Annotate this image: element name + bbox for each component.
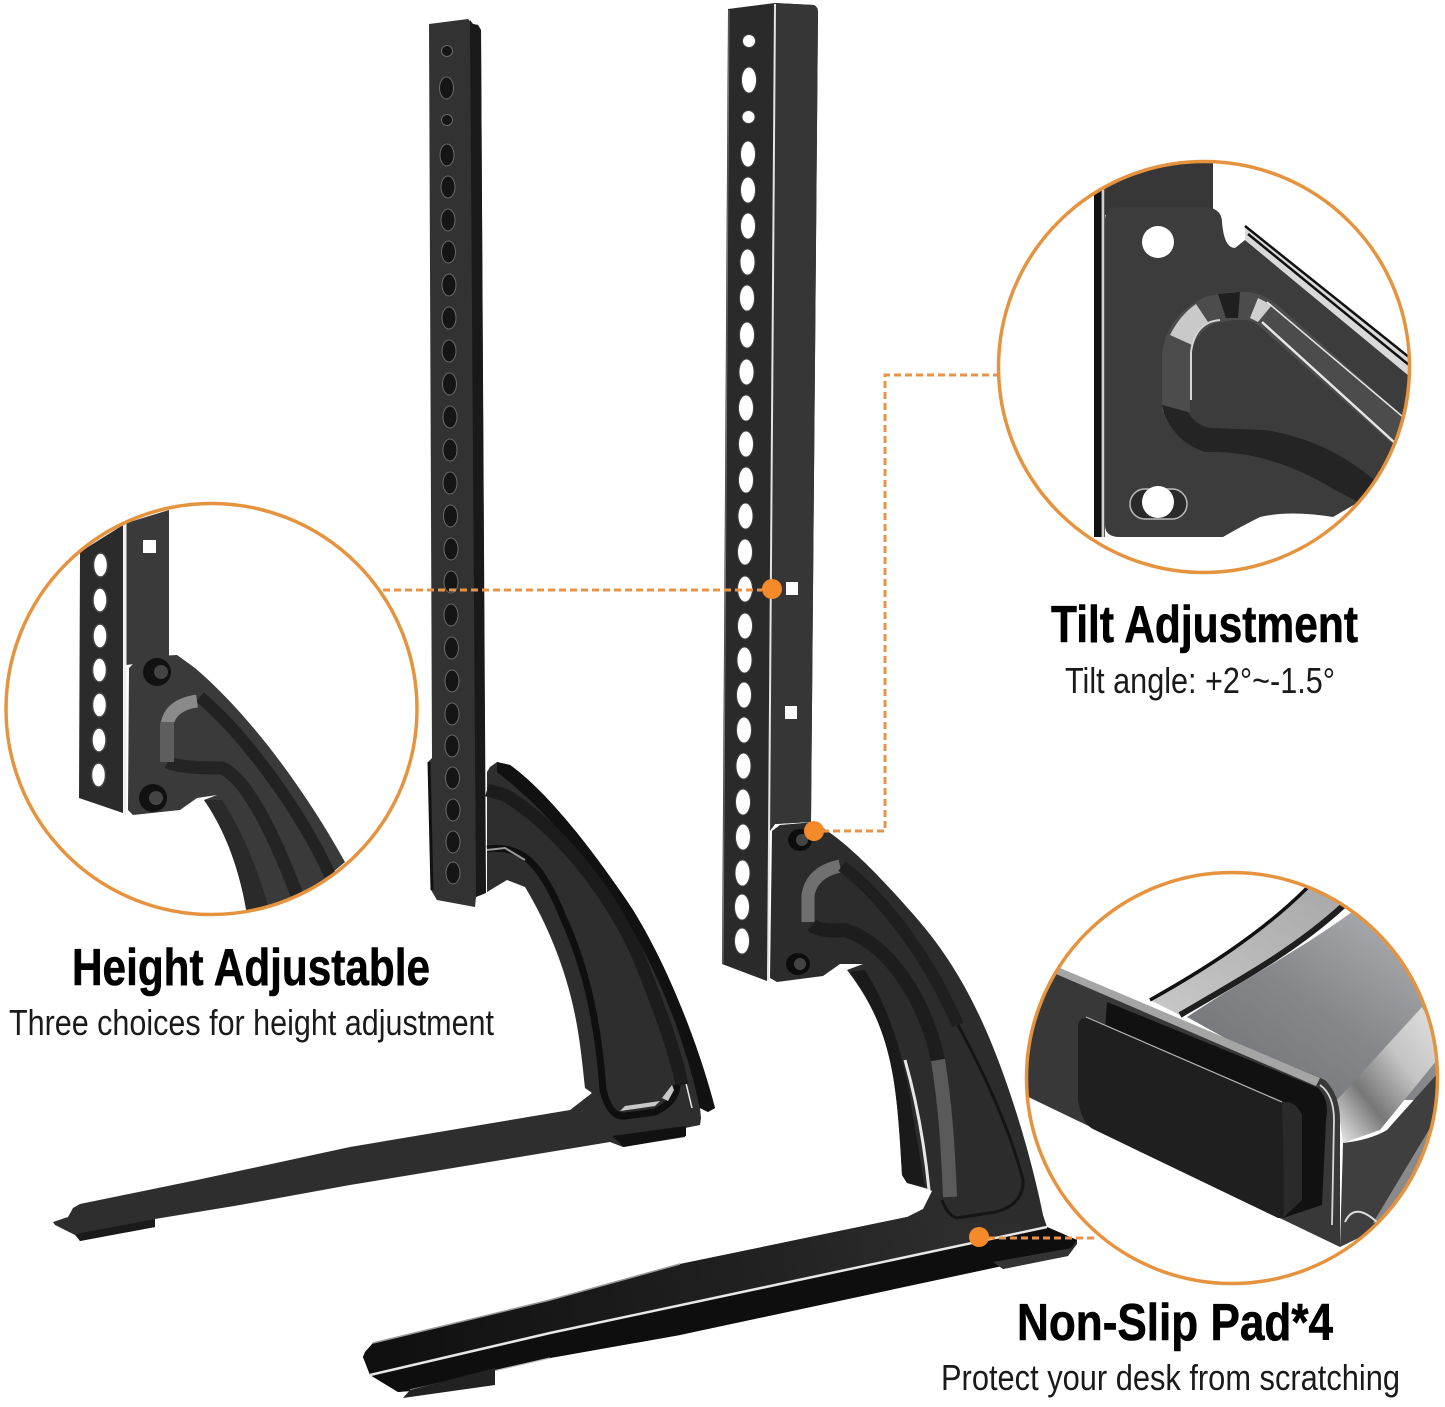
orange marker: height adjustment	[762, 579, 782, 599]
orange marker: tilt	[804, 821, 824, 841]
callout: tilt adjustment detail circle	[998, 150, 1420, 572]
right stand	[363, 3, 1077, 1398]
label: height adjustable: Height Adjustable	[72, 939, 430, 997]
label: tilt adjustment	[1051, 596, 1358, 701]
orange marker: pad	[969, 1227, 989, 1247]
label: tilt adjustment: Tilt angle: +2°~-1.5°	[1065, 660, 1335, 701]
label: tilt adjustment: Tilt Adjustment	[1051, 596, 1358, 654]
dashed connector: height adjustable	[383, 588, 762, 592]
right stand upright bar	[722, 3, 818, 981]
callout: height adjustable detail circle	[6, 504, 417, 915]
dashed connector: non-slip pad	[988, 1236, 1098, 1240]
right bar slots	[734, 34, 756, 954]
left stand	[53, 19, 715, 1241]
label: height adjustable	[9, 939, 494, 1043]
label: non-slip pad: Non-Slip Pad*4	[1017, 1294, 1333, 1352]
left bar slots	[440, 46, 460, 884]
label: height adjustable: Three choices for height adjustment	[9, 1002, 494, 1043]
callout: non-slip pad detail circle	[1020, 872, 1445, 1284]
dashed connector: tilt adjustment	[822, 375, 997, 831]
label: non-slip pad	[941, 1294, 1400, 1398]
left stand foot	[53, 762, 715, 1241]
right stand foot	[363, 822, 1077, 1398]
left stand upright bar	[428, 19, 486, 907]
